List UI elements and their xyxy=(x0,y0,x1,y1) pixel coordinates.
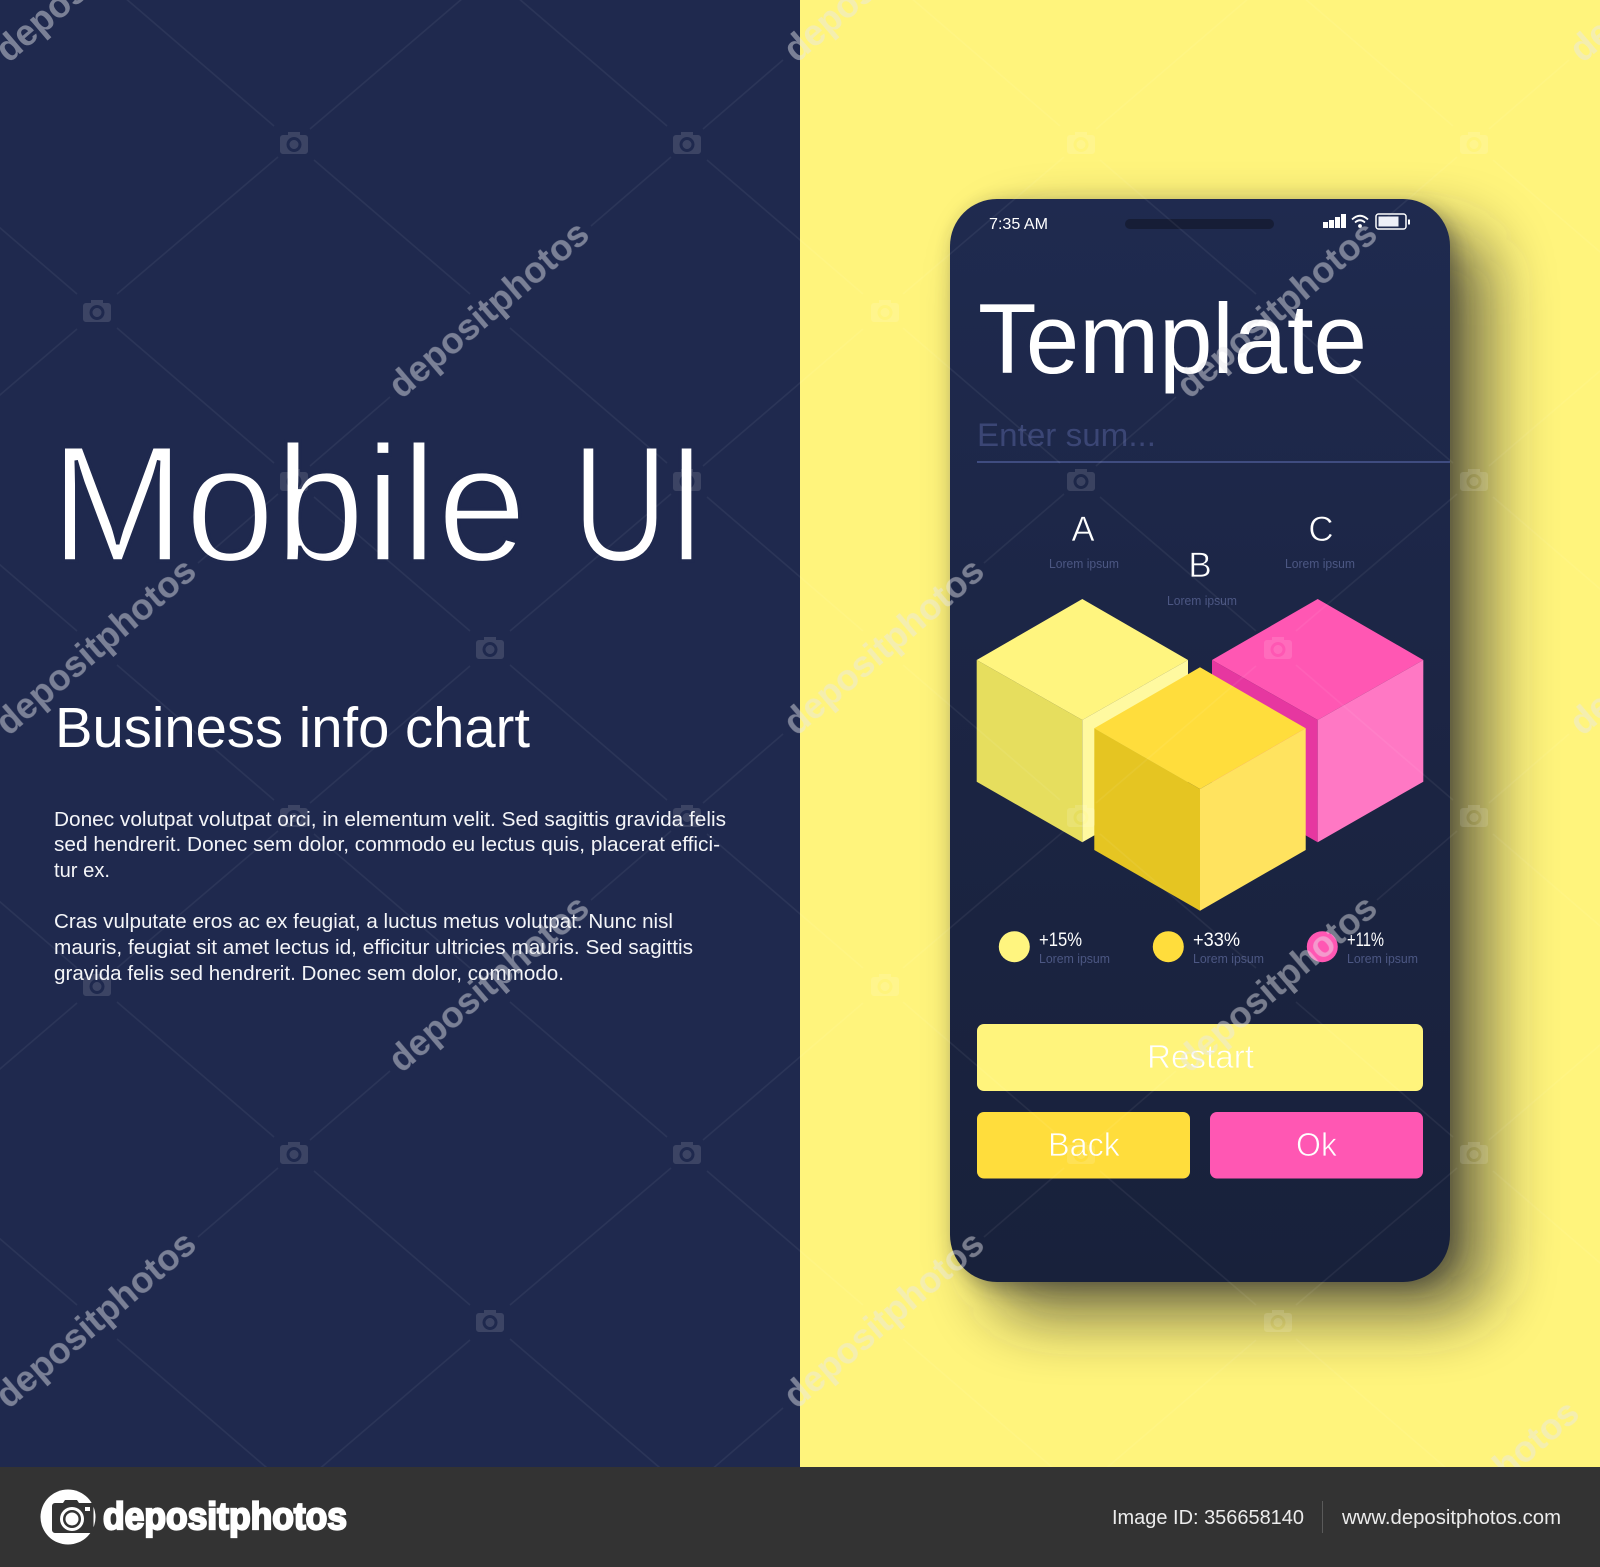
title: Mobile UI: Mobile xyxy=(50,412,527,597)
legend item +11% xyxy=(1307,929,1418,966)
column label A xyxy=(1049,510,1119,571)
column label C: Lorem ipsum xyxy=(1285,557,1355,571)
column label C: C xyxy=(1308,510,1334,549)
panel: phone mockup xyxy=(950,199,1450,1282)
button: Back xyxy=(977,1112,1190,1178)
image id: Image ID: 356658140 xyxy=(1112,1507,1304,1529)
title: Mobile UI: UI xyxy=(572,412,705,597)
website url: www.depositphotos.com xyxy=(1341,1507,1561,1529)
legend item +11%: +11% xyxy=(1347,929,1384,951)
legend item +33% xyxy=(1153,929,1264,966)
icon: battery xyxy=(1376,214,1410,229)
input placeholder: Enter sum: Enter sum... xyxy=(977,417,1156,453)
button: Back: Back xyxy=(1048,1126,1120,1163)
text block: description paragraphs: Donec volutpat volutpat orci, in elementum velit. Sed sagittis gravida felis xyxy=(54,808,726,831)
input underline xyxy=(977,461,1450,463)
text block: description paragraphs xyxy=(54,808,726,985)
button: Ok: Ok xyxy=(1296,1126,1337,1163)
column label A: Lorem ipsum xyxy=(1049,557,1119,571)
text block: description paragraphs: tur ex. xyxy=(54,859,110,882)
watermark depositphotos text: depositphotos xyxy=(775,549,992,743)
phone notch xyxy=(1125,219,1274,229)
text block: description paragraphs: mauris, feugiat sit amet lectus id, efficitur ultricies mauris. Sed sagittis xyxy=(54,936,693,959)
text block: description paragraphs: sed hendrerit. Donec sem dolor, commodo eu lectus quis, placerat effici- xyxy=(54,833,720,856)
watermark camera icons xyxy=(83,132,1488,1332)
panel: navy left background xyxy=(0,0,800,1467)
button: Restart: Restart xyxy=(1147,1038,1254,1075)
logo wordmark: depositphotos xyxy=(103,1496,347,1538)
button: Ok xyxy=(1210,1112,1423,1178)
column label B xyxy=(1167,546,1237,608)
watermark depositphotos text: depositphotos xyxy=(380,212,597,406)
column label A: A xyxy=(1071,510,1095,549)
icon: signal bars xyxy=(1323,214,1346,228)
icon: wifi xyxy=(1352,216,1368,227)
heading: Template: Template xyxy=(978,283,1367,394)
watermark depositphotos text: depositphotos xyxy=(380,886,597,1080)
legend item +15%: +15% xyxy=(1039,929,1082,951)
panel: footer bar xyxy=(0,1467,1600,1567)
legend item +11%: Lorem ipsum xyxy=(1347,952,1418,966)
legend item +15%: Lorem ipsum xyxy=(1039,952,1110,966)
button: Restart xyxy=(977,1024,1423,1091)
legend item +33%: Lorem ipsum xyxy=(1193,952,1264,966)
watermark depositphotos text: depositphotos xyxy=(1168,886,1385,1080)
legend item +33%: +33% xyxy=(1193,929,1240,951)
watermark depositphotos text: depositphotos xyxy=(1168,212,1385,406)
text block: description paragraphs: Cras vulputate eros ac ex feugiat, a luctus metus volutpat. Nunc nisl xyxy=(54,910,673,933)
status bar time: 7:35 AM xyxy=(989,216,1048,233)
watermark depositphotos text: depositphotos xyxy=(775,1222,992,1416)
column label B: Lorem ipsum xyxy=(1167,594,1237,608)
cube B gold xyxy=(1094,667,1306,911)
chart: isometric cubes xyxy=(977,599,1423,911)
panel: yellow right background xyxy=(800,0,1600,1467)
cube A pale yellow xyxy=(977,599,1188,842)
icon: depositphotos camera logo xyxy=(40,1490,96,1544)
phone drop shadow xyxy=(956,205,1490,1315)
legend item +15% xyxy=(999,929,1110,966)
column label C xyxy=(1285,510,1355,571)
cube C pink xyxy=(1212,599,1423,842)
column label B: B xyxy=(1188,546,1212,585)
text block: description paragraphs: gravida felis sed hendrerit. Donec sem dolor, commodo. xyxy=(54,962,564,985)
subtitle: Business info chart: Business info chart xyxy=(55,696,530,760)
